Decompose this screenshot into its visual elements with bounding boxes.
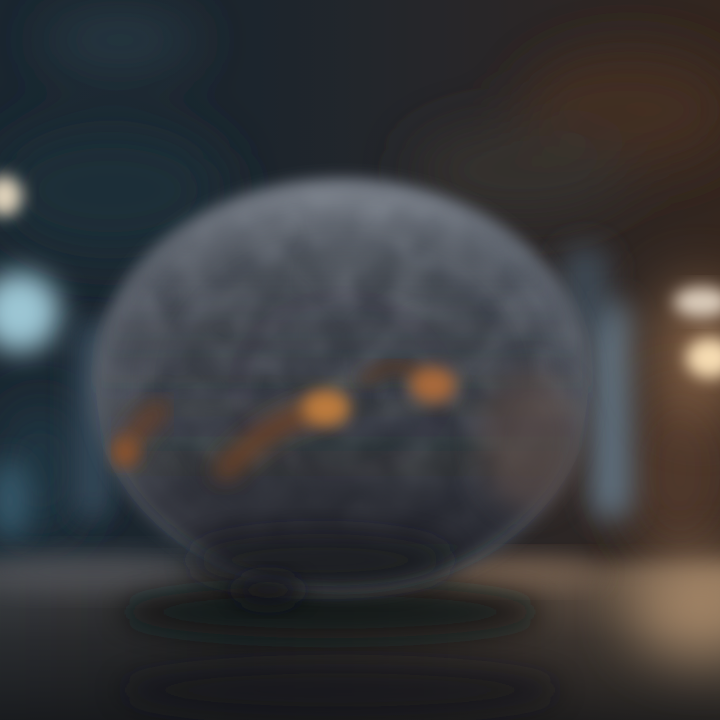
orange glowing cracks bbox=[113, 366, 456, 470]
left window glow bbox=[0, 272, 60, 540]
blue-grey column behind sphere bbox=[75, 245, 632, 520]
sphere base shadow bbox=[190, 534, 450, 586]
sphere surface mottling bbox=[126, 206, 562, 520]
sphere shadow on floor bbox=[120, 586, 540, 638]
sphere shading bbox=[96, 183, 588, 587]
sphere body bbox=[92, 179, 592, 591]
ceiling and wall tones bbox=[0, 18, 720, 560]
sphere warm lower right bbox=[480, 370, 580, 510]
sphere bbox=[80, 170, 610, 606]
left small light bbox=[0, 176, 22, 216]
sphere foot bbox=[234, 574, 302, 606]
right lights bbox=[650, 280, 720, 420]
foreground floor shadow bbox=[120, 664, 560, 716]
floor bbox=[0, 554, 720, 720]
